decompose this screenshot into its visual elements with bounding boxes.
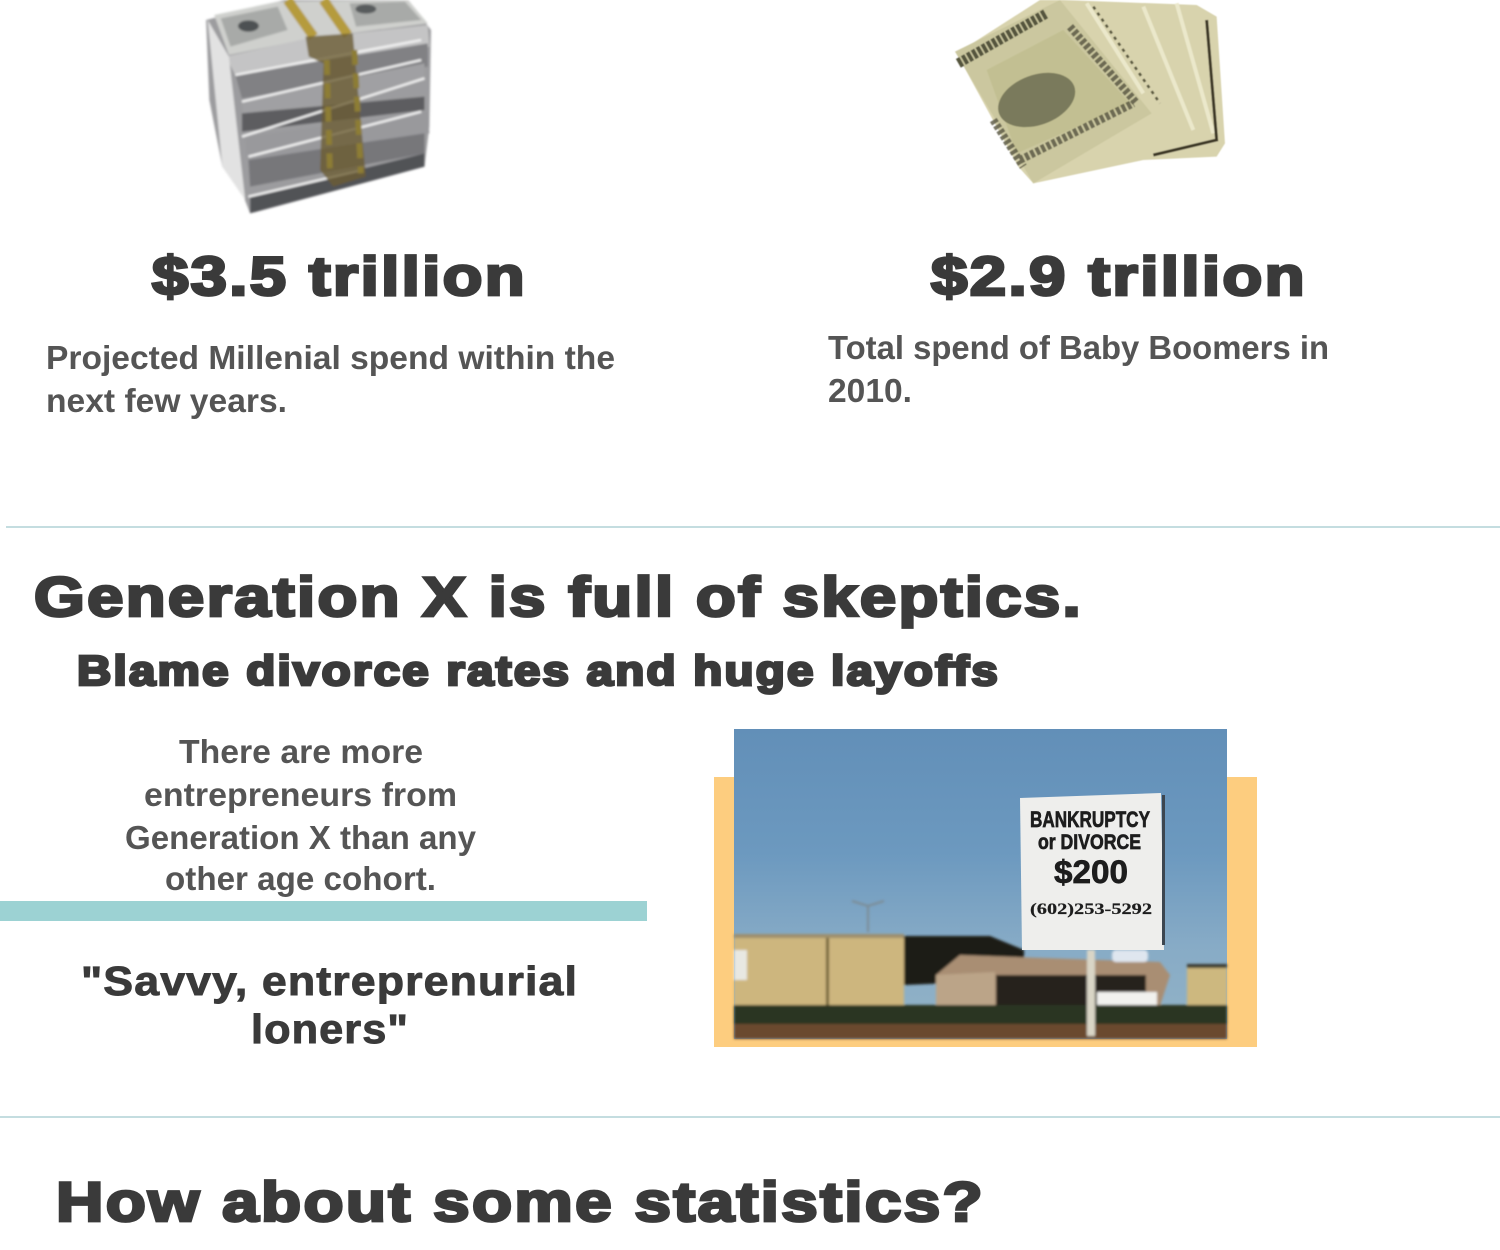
heading: statistics: How about some statistics? bbox=[56, 1170, 985, 1233]
billboard sign bbox=[1020, 793, 1165, 950]
text: projected millennial spend bbox=[46, 339, 615, 419]
text: total boomer spend: 2010. bbox=[828, 372, 912, 409]
text: projected millennial spend: Projected Millenial spend within the bbox=[46, 339, 615, 376]
stat: $3.5 trillion: $3.5 trillion bbox=[152, 245, 527, 307]
text: total boomer spend bbox=[828, 329, 1329, 409]
heading: generation x: Generation X is full of skeptics. bbox=[34, 565, 1083, 628]
stat: $2.9 trillion: $2.9 trillion bbox=[931, 245, 1307, 307]
divider bar bbox=[0, 901, 647, 921]
billboard sign: $200 bbox=[1054, 854, 1128, 890]
panel: millennial spend bbox=[46, 0, 615, 419]
billboard sign: or DIVORCE bbox=[1038, 831, 1141, 854]
quote: savvy loners bbox=[81, 958, 578, 1052]
text: entrepreneurs: Generation X than any bbox=[125, 819, 477, 856]
icon: fanned worn dollar bills bbox=[955, 0, 1225, 183]
text: projected millennial spend: next few years. bbox=[46, 382, 287, 419]
text: entrepreneurs: entrepreneurs from bbox=[144, 776, 457, 813]
billboard sign: BANKRUPTCY bbox=[1030, 807, 1150, 832]
text: total boomer spend: Total spend of Baby Boomers in bbox=[828, 329, 1329, 366]
panel: generation x bbox=[0, 565, 1257, 1052]
panel: baby boomer spend bbox=[828, 0, 1329, 409]
subheading: divorce and layoffs: Blame divorce rates and huge layoffs bbox=[77, 647, 1000, 694]
quote: savvy loners: "Savvy, entreprenurial bbox=[81, 958, 578, 1004]
quote: savvy loners: loners" bbox=[251, 1006, 409, 1052]
text: entrepreneurs: There are more bbox=[179, 733, 423, 770]
photo backing panel bbox=[714, 777, 1257, 1047]
icon: stack of banded cash bbox=[206, 0, 431, 213]
billboard sign: (602)253-5292 bbox=[1030, 901, 1152, 918]
text: entrepreneurs bbox=[125, 733, 477, 897]
text: entrepreneurs: other age cohort. bbox=[165, 860, 436, 897]
photo: bankruptcy or divorce billboard bbox=[734, 729, 1227, 1039]
